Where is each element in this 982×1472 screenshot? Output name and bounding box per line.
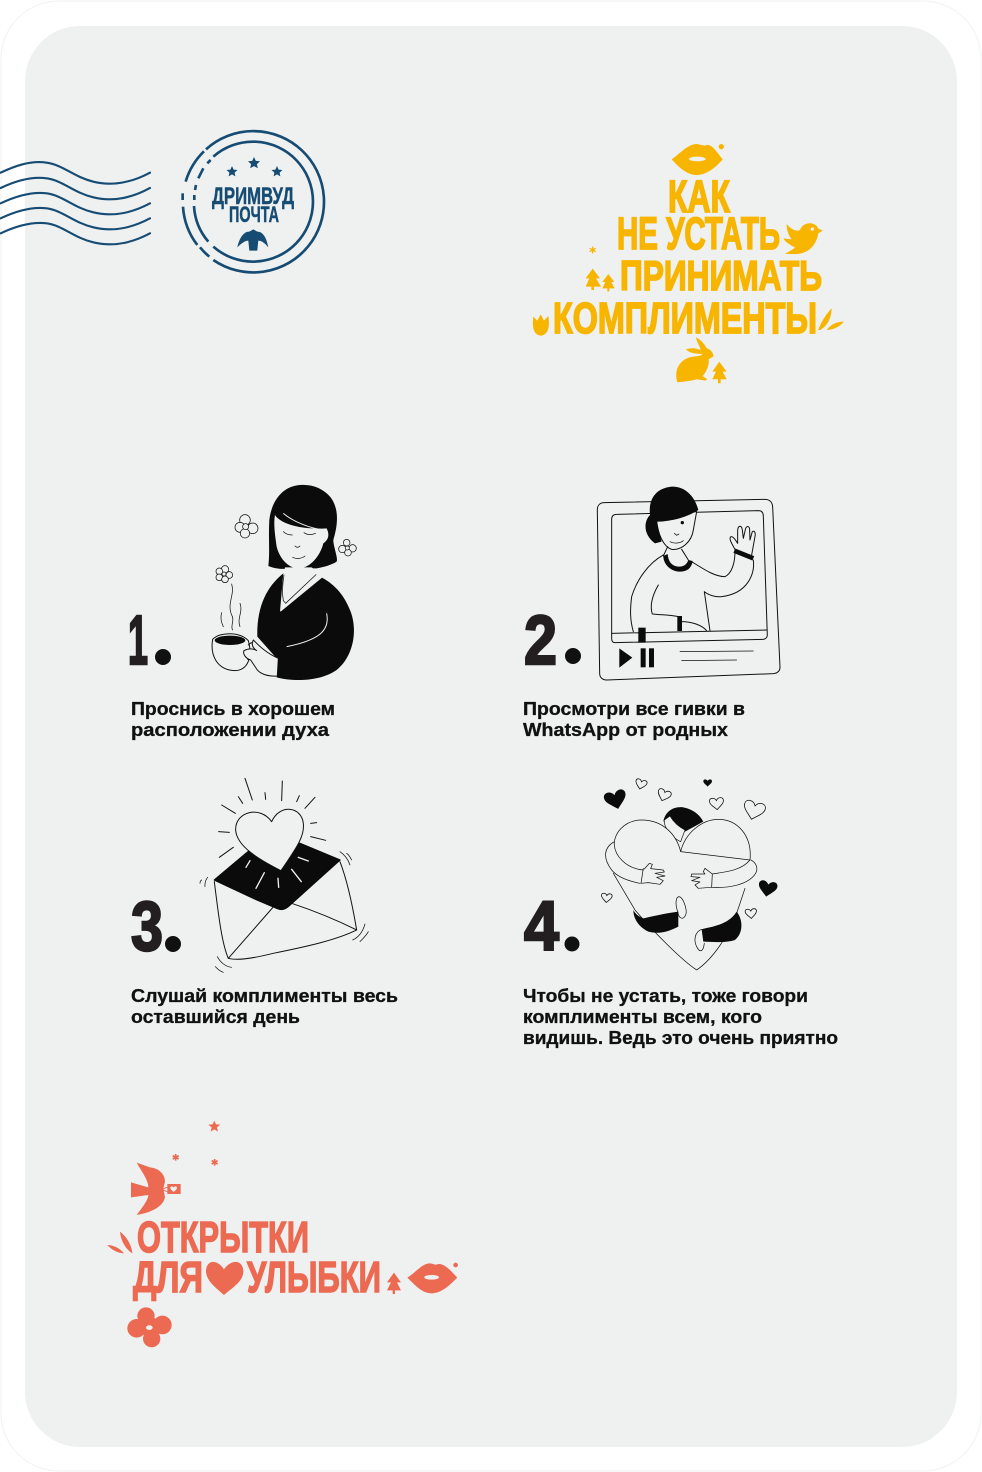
logo: Открытки для улыбки: УЛЫБКИ <box>247 1253 381 1302</box>
title text: КАК <box>668 171 730 222</box>
text: step 1: расположении духа <box>131 719 330 740</box>
stamp rings <box>183 131 324 272</box>
step 2 <box>523 487 780 740</box>
number 1 dot <box>155 649 171 665</box>
text: step 3 <box>131 985 398 1027</box>
step 3 <box>131 778 398 1027</box>
step 1 <box>128 485 356 740</box>
number 2 dot <box>565 648 581 664</box>
number 3: 3 <box>131 887 163 965</box>
illustration: woman with coffee <box>212 485 356 680</box>
title block <box>533 144 844 383</box>
text: step 2: Просмотри все гивки в <box>523 698 745 719</box>
text: step 1 <box>131 698 335 740</box>
text: step 4: Чтобы не устать, тоже говори <box>523 985 808 1006</box>
number 4 dot <box>564 936 580 952</box>
logo: Открытки для улыбки: ДЛЯ <box>133 1253 203 1302</box>
text: step 3: Слушай комплименты весь <box>131 985 398 1006</box>
illustration: hugging a heart <box>601 778 778 970</box>
text: step 2 <box>523 698 745 740</box>
stamp text: ДРИМВУД <box>212 183 294 210</box>
number 2: 2 <box>524 601 557 679</box>
logo icons <box>107 1121 458 1347</box>
title block: ПРИНИМАТЬ <box>620 252 822 299</box>
logo: Открытки для улыбки <box>107 1121 458 1347</box>
text: step 4: видишь. Ведь это очень приятно <box>523 1027 838 1048</box>
postmark stamp: Дримвуд почта: ПОЧТА <box>229 202 279 227</box>
step 4 <box>523 778 838 1048</box>
text: step 4 <box>523 985 838 1048</box>
number 1: 1 <box>128 601 148 679</box>
illustration: envelope with heart <box>200 778 368 972</box>
text: step 2: WhatsApp от родных <box>523 719 729 740</box>
text: step 4: комплименты всем, кого <box>523 1006 762 1027</box>
text: step 1: Проснись в хорошем <box>131 698 335 719</box>
logo text: ОТКРЫТКИ <box>137 1213 309 1262</box>
stamp bird <box>237 229 268 251</box>
number 3 dot <box>165 936 181 952</box>
number 4: 4 <box>524 887 559 965</box>
title decorative icons <box>533 144 844 383</box>
stamp stars <box>227 157 282 176</box>
postal wave cancellation lines <box>1 162 150 244</box>
title block: НЕ УСТАТЬ <box>617 208 780 259</box>
illustration: video message <box>597 487 780 680</box>
postmark stamp: Дримвуд почта <box>183 131 324 272</box>
title block: КОМПЛИМЕНТЫ <box>553 294 817 343</box>
text: step 3: оставшийся день <box>131 1006 300 1027</box>
